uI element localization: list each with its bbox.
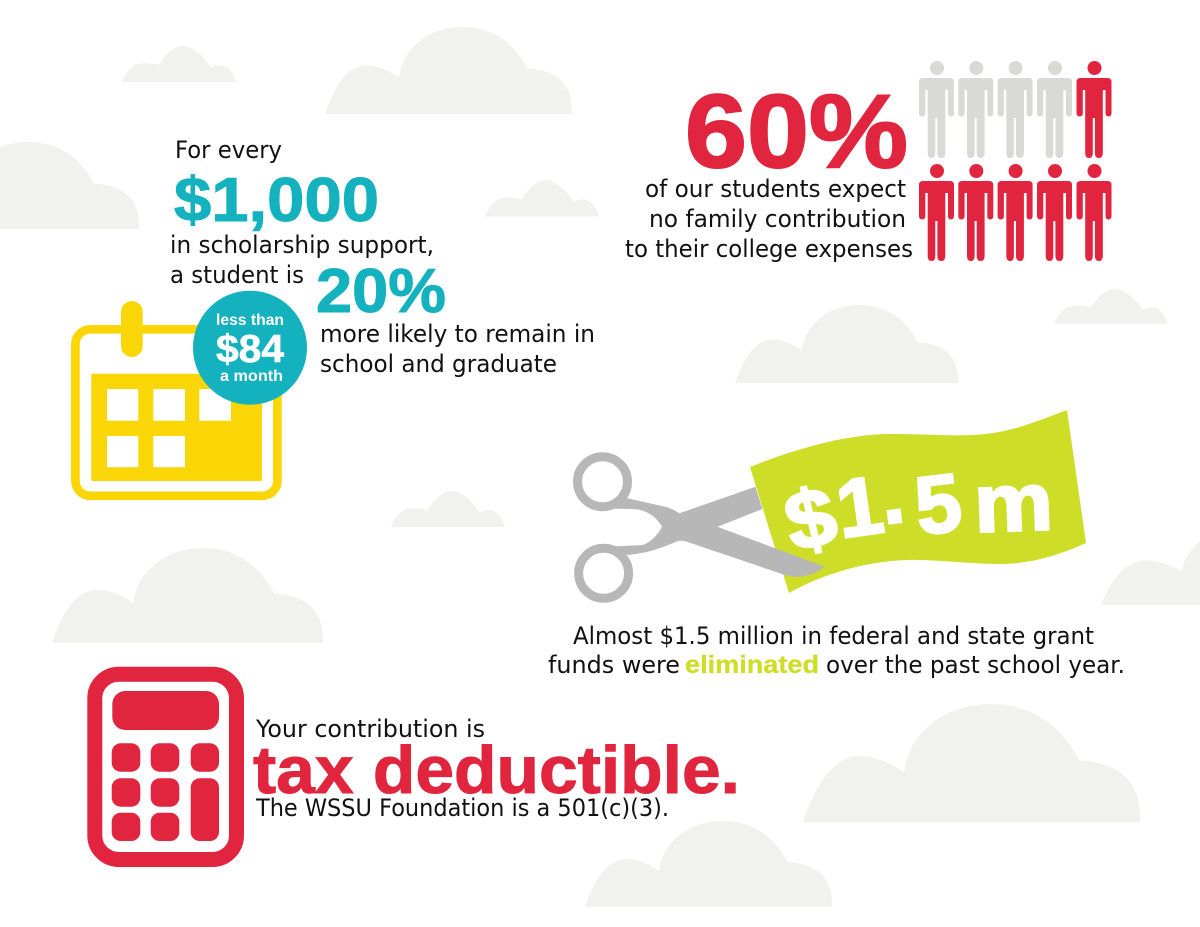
pictogram: people, six of ten red [919, 61, 1112, 261]
text: a student is: a student is [170, 261, 304, 289]
text: for every: For every [175, 136, 282, 164]
text: no family contribution: to their college expenses [625, 235, 913, 263]
text: grant funds eliminated: over the past school year. [826, 651, 1125, 679]
text: tax deductible: tax deductible. [253, 733, 740, 808]
figure: 20%: 20% [316, 257, 446, 326]
icon: scissors [578, 457, 825, 598]
text: tax deductible: The WSSU Foundation is a 501(c)(3). [255, 794, 669, 822]
flag: $1.5m: 1 [831, 459, 889, 556]
flag: $1.5m: m [972, 456, 1054, 550]
text: tax deductible [253, 715, 740, 822]
text: no family contribution [625, 175, 913, 263]
badge: less than $84 a month: a month [220, 368, 283, 385]
text: in scholarship support: in scholarship support, [170, 231, 434, 259]
badge: less than $84 a month: $84 [216, 328, 284, 371]
badge: less than $84 a month [193, 291, 307, 405]
flag: $1.5m [750, 410, 1086, 593]
badge: less than $84 a month: less than [216, 312, 284, 329]
text: more likely to remain: more likely to remain in [320, 320, 595, 348]
flag: $1.5m: . [875, 449, 909, 542]
text: grant funds eliminated [548, 622, 1125, 679]
icon: calendar [75, 301, 277, 496]
text: grant funds eliminated: funds were [548, 651, 680, 679]
statistic: 60%: 60% [685, 74, 908, 190]
text: grant funds eliminated: Almost $1.5 million in federal and state grant [573, 622, 1094, 650]
scholarship text block [170, 136, 595, 378]
text: school and graduate: school and graduate [320, 350, 557, 378]
flag: $1.5m: 5 [910, 457, 966, 553]
icon: calculator [95, 674, 236, 860]
text: grant funds eliminated: eliminated [685, 651, 819, 679]
text: no family contribution: of our students expect [645, 175, 906, 203]
flag: $1.5m: $ [777, 470, 845, 570]
text: no family contribution: no family contribution [649, 205, 906, 233]
figure: $1,000: $1,000 [174, 166, 379, 235]
text: tax deductible: Your contribution is [255, 715, 485, 743]
